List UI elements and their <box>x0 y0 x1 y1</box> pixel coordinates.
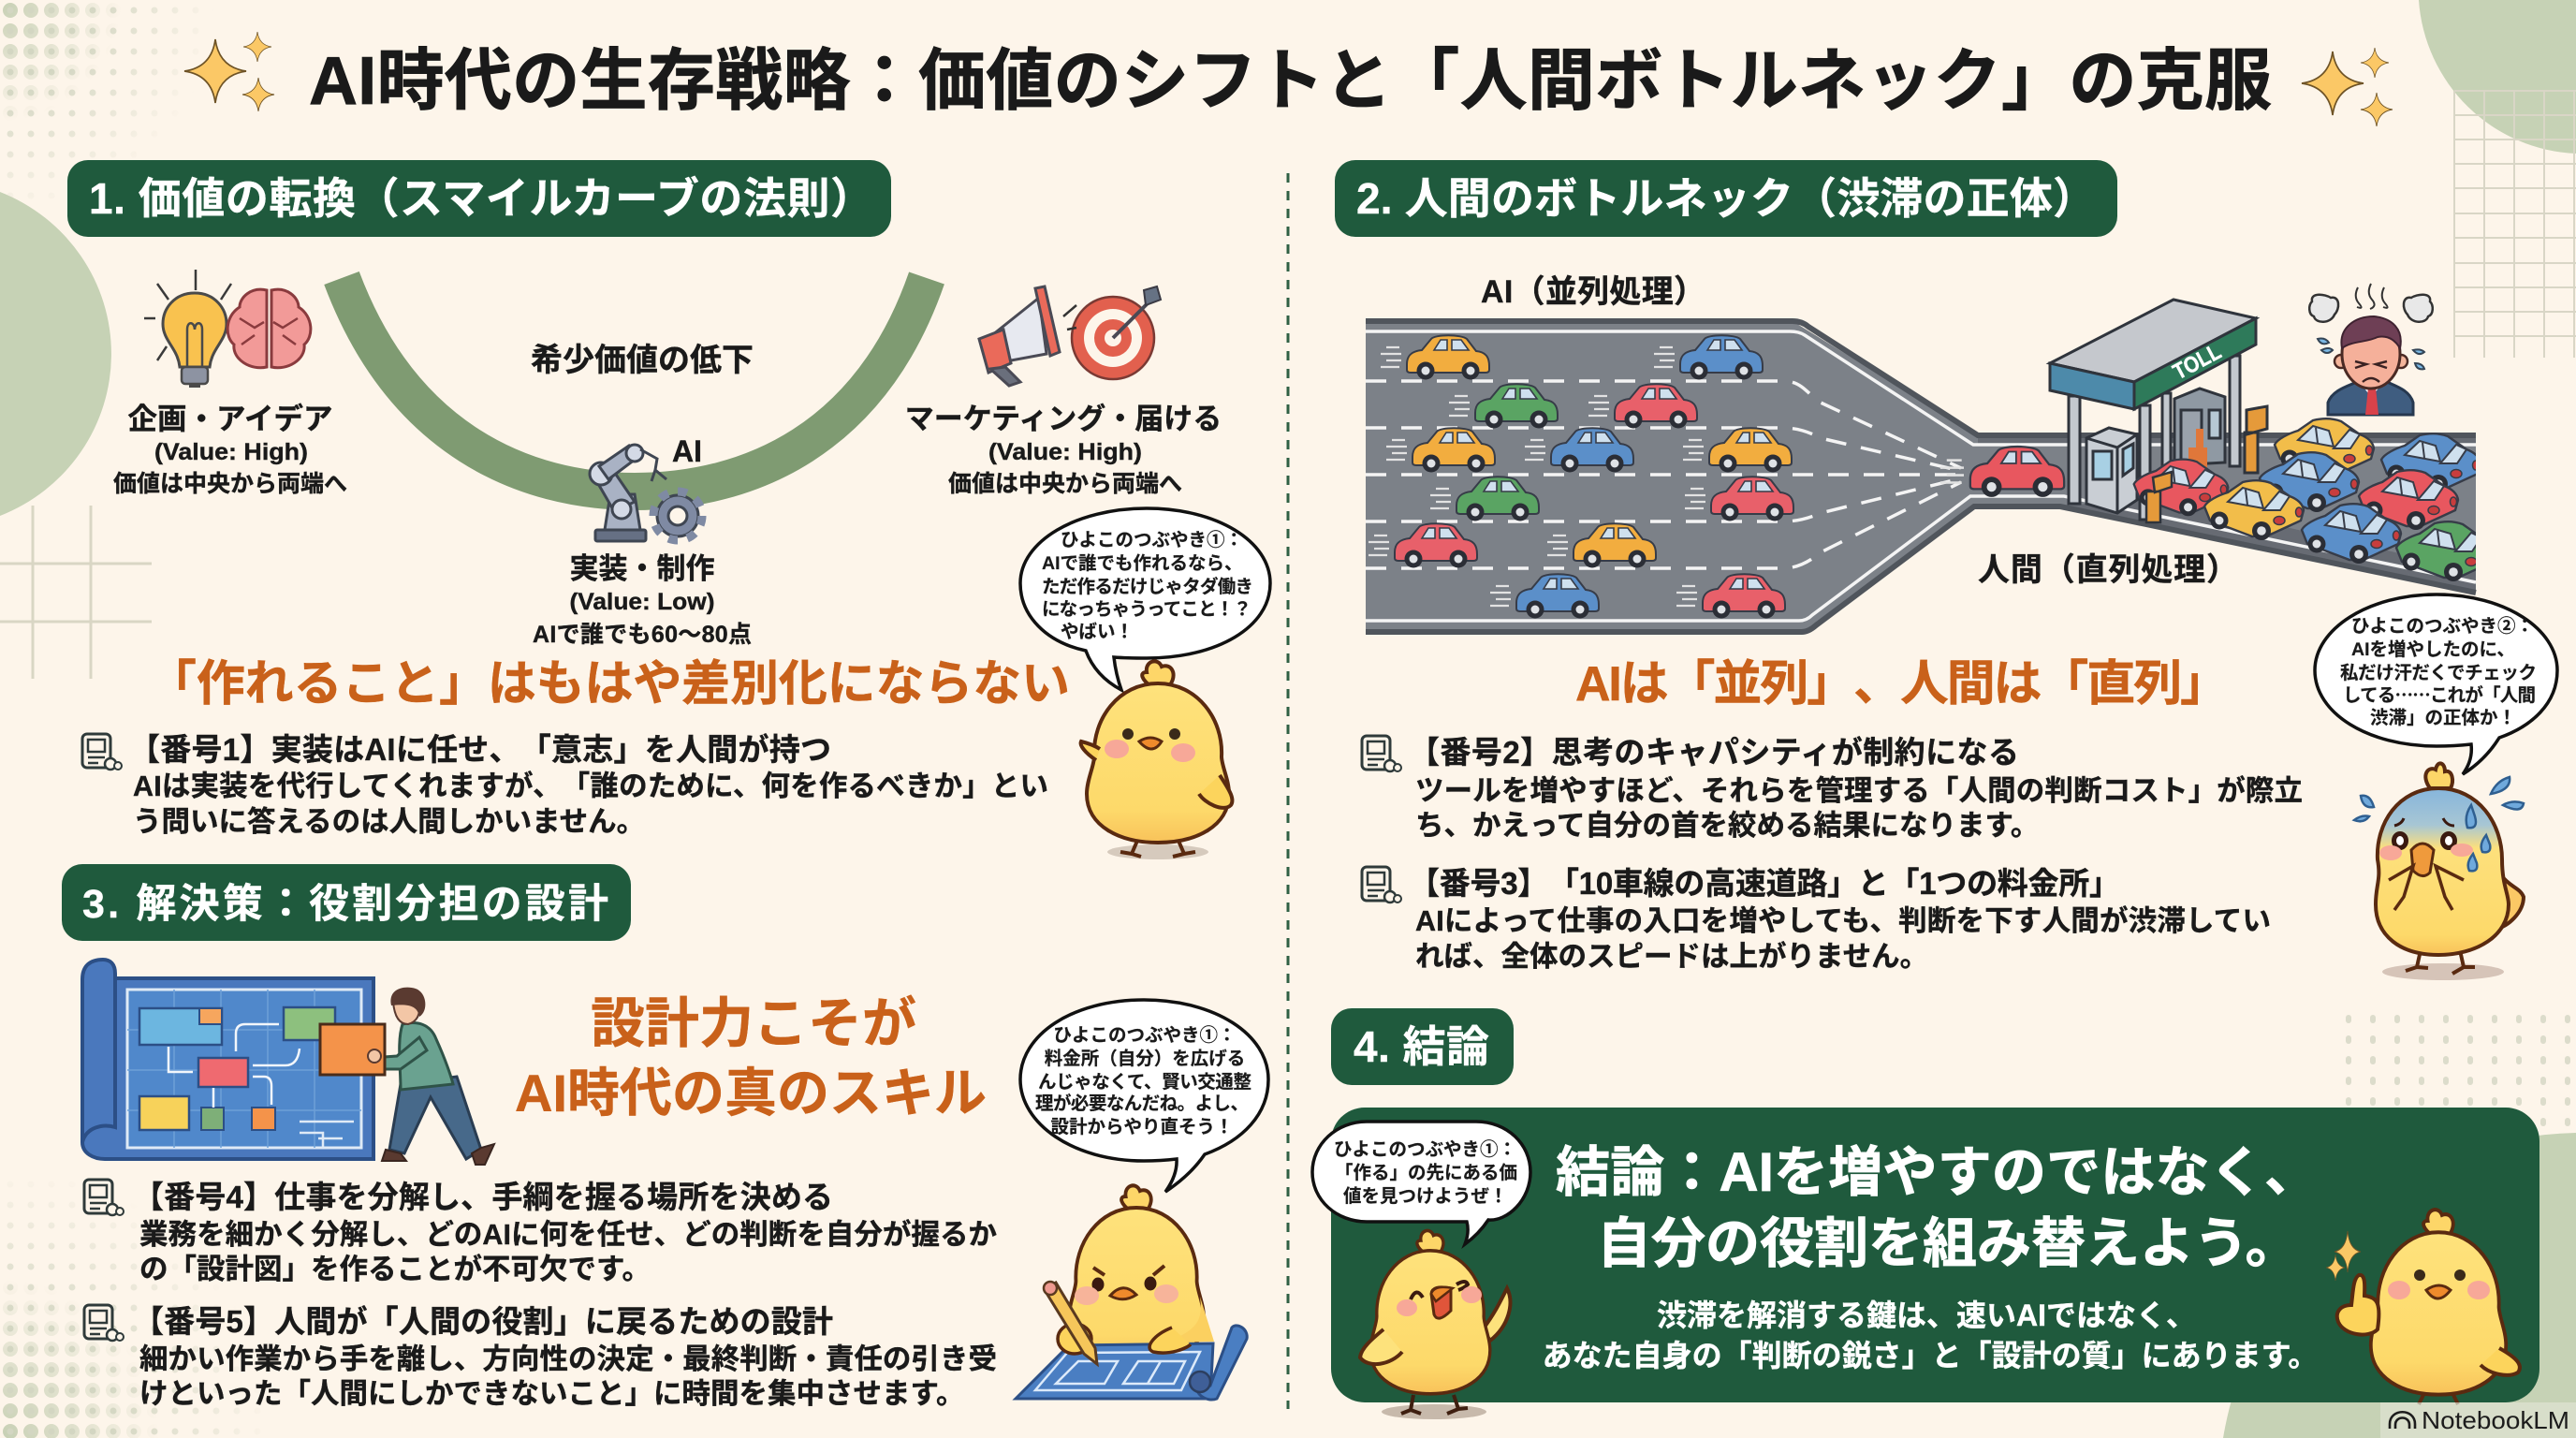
panel: section 1 value shift <box>67 160 1270 859</box>
text: point 5 <box>84 1304 997 1410</box>
icon: robot arm and gear <box>590 445 702 541</box>
text: marketing label: (Value: High) <box>988 439 1142 465</box>
text: implementation label <box>533 552 752 648</box>
callout: chick bubble 1 <box>1020 508 1270 690</box>
callout: chick bubble 2: 私だけ汗だくでチェック <box>2340 663 2537 683</box>
icon: chick drawing on blueprint <box>1016 1185 1247 1400</box>
text: point 4 <box>84 1180 997 1285</box>
callout: chick bubble 3: ひよこのつぶやき①： <box>1053 1025 1237 1046</box>
text: point 4: の「設計図」を作ることが不可欠です。 <box>139 1253 651 1285</box>
label: AI: AI <box>672 434 702 468</box>
icon: title sparkles left <box>184 32 274 111</box>
heading: section 3: 3. 解決策：役割分担の設計 <box>82 882 608 927</box>
callout: chick bubble 2: AIを増やしたのに、 <box>2351 639 2515 660</box>
callout: chick bubble 1: になっちゃうってこと！？ <box>1042 599 1251 620</box>
text: implementation label: AIで誰でも60～80点 <box>533 622 752 648</box>
icon: cheering chick <box>1360 1230 1510 1419</box>
headline: making is no longer a differentiator: 「作れること」はもはや差別化にならない <box>148 657 1070 712</box>
icon: thumbs up chick <box>2326 1210 2520 1404</box>
icon: NotebookLM logo: NotebookLM <box>2422 1406 2569 1434</box>
heading: section 1: 1. 価値の転換（スマイルカーブの法則） <box>89 174 873 223</box>
text: marketing label <box>905 403 1222 497</box>
heading: section 4 <box>1331 1008 1514 1085</box>
text: planning label: 企画・アイデア <box>128 402 332 435</box>
icon: stressed worker <box>2309 284 2433 415</box>
text: marketing label: マーケティング・届ける <box>905 403 1222 435</box>
text: point 5: けといった「人間にしかできないこと」に時間を集中させます。 <box>139 1378 964 1410</box>
text: implementation label: (Value: Low) <box>569 589 715 615</box>
panel: section 3 solution <box>62 864 1268 1410</box>
text: point 1: 【番号1】実装はAIに任せ、「意志」を人間が持つ <box>129 732 831 767</box>
text: conclusion detail: あなた自身の「判断の鋭さ」と「設計の質」にあります。 <box>1543 1339 2318 1372</box>
icon: title sparkles right <box>2302 48 2393 126</box>
callout: chick bubble 2: してる……これが「人間 <box>2343 680 2536 707</box>
text: point 1 <box>82 732 1048 838</box>
panel: conclusion card <box>1331 1108 2539 1402</box>
cars: parallel lanes <box>1368 335 1793 618</box>
headline: design skill: 設計力こそが <box>591 993 916 1054</box>
label: falling scarcity value: 希少価値の低下 <box>531 343 754 378</box>
panel: section 2 human bottleneck <box>1312 160 2576 1438</box>
text: implementation label: 実装・制作 <box>569 552 715 585</box>
text: point 4: 【番号4】仕事を分解し、手綱を握る場所を決める <box>133 1180 833 1214</box>
heading: section 2: 2. 人間のボトルネック（渋滞の正体） <box>1356 174 2096 223</box>
icon: toll booth <box>2050 300 2267 520</box>
cars: jammed queue <box>2134 418 2496 581</box>
icon: blueprint <box>82 960 373 1159</box>
icon: light bulb and brain <box>144 270 311 388</box>
text: point 5: 【番号5】人間が「人間の役割」に戻るための設計 <box>133 1304 833 1339</box>
text: planning label <box>113 402 347 497</box>
icon: NotebookLM logo <box>2380 1402 2576 1438</box>
heading: section 3 <box>62 864 631 941</box>
text: conclusion detail <box>1543 1299 2318 1372</box>
callout: chick bubble 4: ひよこのつぶやき①： <box>1334 1139 1516 1160</box>
callout: chick bubble 3 <box>1020 1000 1268 1192</box>
callout: chick bubble 3: んじゃなくて、賢い交通整 <box>1038 1072 1251 1093</box>
callout: chick bubble 2: ひよこのつぶやき②： <box>2351 616 2534 637</box>
callout: chick bubble 3: 設計からやり直そう！ <box>1050 1116 1234 1137</box>
callout: chick bubble 1: AIで誰でも作れるなら、 <box>1042 553 1243 574</box>
heading: section 1 <box>67 160 891 237</box>
label: human serial: 人間（直列処理） <box>1978 552 2238 588</box>
text: planning label: (Value: High) <box>154 439 308 465</box>
callout: chick bubble 4: 値を見つけようぜ！ <box>1343 1186 1508 1207</box>
text: point 1: AIは実装を代行してくれますが、「誰のために、何を作るべきか」とい <box>133 770 1048 802</box>
car: single car at the neck <box>1940 447 2064 497</box>
text: point 2: ツールを増やすほど、それらを管理する「人間の判断コスト」が際立 <box>1415 774 2303 807</box>
callout: chick bubble 1: ひよこのつぶやき①： <box>1061 530 1243 550</box>
callout: chick bubble 3: 料金所（自分）を広げる <box>1045 1049 1245 1069</box>
headline: design skill <box>515 993 987 1123</box>
callout: chick bubble 1: やばい！ <box>1061 622 1134 642</box>
headline: conclusion <box>1556 1142 2319 1274</box>
text: point 5: 細かい作業から手を離し、方向性の決定・最終判断・責任の引き受 <box>139 1343 997 1375</box>
text: conclusion detail: 渋滞を解消する鍵は、速いAIではなく、 <box>1657 1299 2196 1332</box>
callout: chick bubble 3: 理が必要なんだね。よし、 <box>1035 1093 1249 1114</box>
text: point 3: AIによって仕事の入口を増やしても、判断を下す人間が渋滞してい <box>1415 904 2271 937</box>
text: point 3: れば、全体のスピードは上がりません。 <box>1415 940 1928 973</box>
chart: smile curve band <box>342 278 927 492</box>
text: point 3 <box>1362 866 2271 973</box>
callout: chick bubble 2: 渋滞」の正体か！ <box>2370 708 2516 728</box>
callout: chick bubble 1: ただ作るだけじゃタダ働き <box>1042 576 1253 597</box>
callout: chick bubble 2 <box>2315 594 2557 774</box>
icon: chick waving <box>1081 661 1232 859</box>
label: AI parallel: AI（並列処理） <box>1481 274 1705 310</box>
text: point 3: 【番号3】「10車線の高速道路」と「1つの料金所」 <box>1409 866 2120 901</box>
icon: megaphone and target <box>979 286 1161 386</box>
callout: chick bubble 4 <box>1312 1122 1530 1244</box>
headline: conclusion: 自分の役割を組み替えよう。 <box>1597 1213 2300 1274</box>
panel: section 4 conclusion <box>1312 1008 2539 1419</box>
icon: person moving a block <box>320 988 494 1165</box>
text: point 2 <box>1362 735 2303 842</box>
chart: highway narrowing to toll gate <box>1366 300 2496 632</box>
text: planning label: 価値は中央から両端へ <box>113 471 347 497</box>
heading: section 4: 4. 結論 <box>1354 1022 1489 1071</box>
heading: section 2 <box>1335 160 2117 237</box>
text: marketing label: 価値は中央から両端へ <box>948 471 1182 497</box>
label: TOLL sign: TOLL <box>2169 339 2225 385</box>
headline: AI parallel human serial: AIは「並列」、人間は「直列」 <box>1575 657 2229 712</box>
text: point 4: 業務を細かく分解し、どのAIに何を任せ、どの判断を自分が握るか <box>139 1218 997 1251</box>
title: AI時代の生存戦略：価値のシフトと「人間ボトルネック」の克服 <box>309 44 2272 119</box>
headline: conclusion: 結論：AIを増やすのではなく、 <box>1556 1142 2319 1203</box>
callout: chick bubble 4: 「作る」の先にある価 <box>1335 1163 1517 1183</box>
icon: sweating chick <box>2354 763 2524 980</box>
text: point 2: ち、かえって自分の首を絞める結果になります。 <box>1415 810 2039 842</box>
text: point 1: う問いに答えるのは人間しかいません。 <box>133 806 645 838</box>
text: point 2: 【番号2】思考のキャパシティが制約になる <box>1409 735 2019 770</box>
headline: design skill: AI時代の真のスキル <box>515 1064 987 1123</box>
icon: barrier post <box>2146 472 2172 522</box>
